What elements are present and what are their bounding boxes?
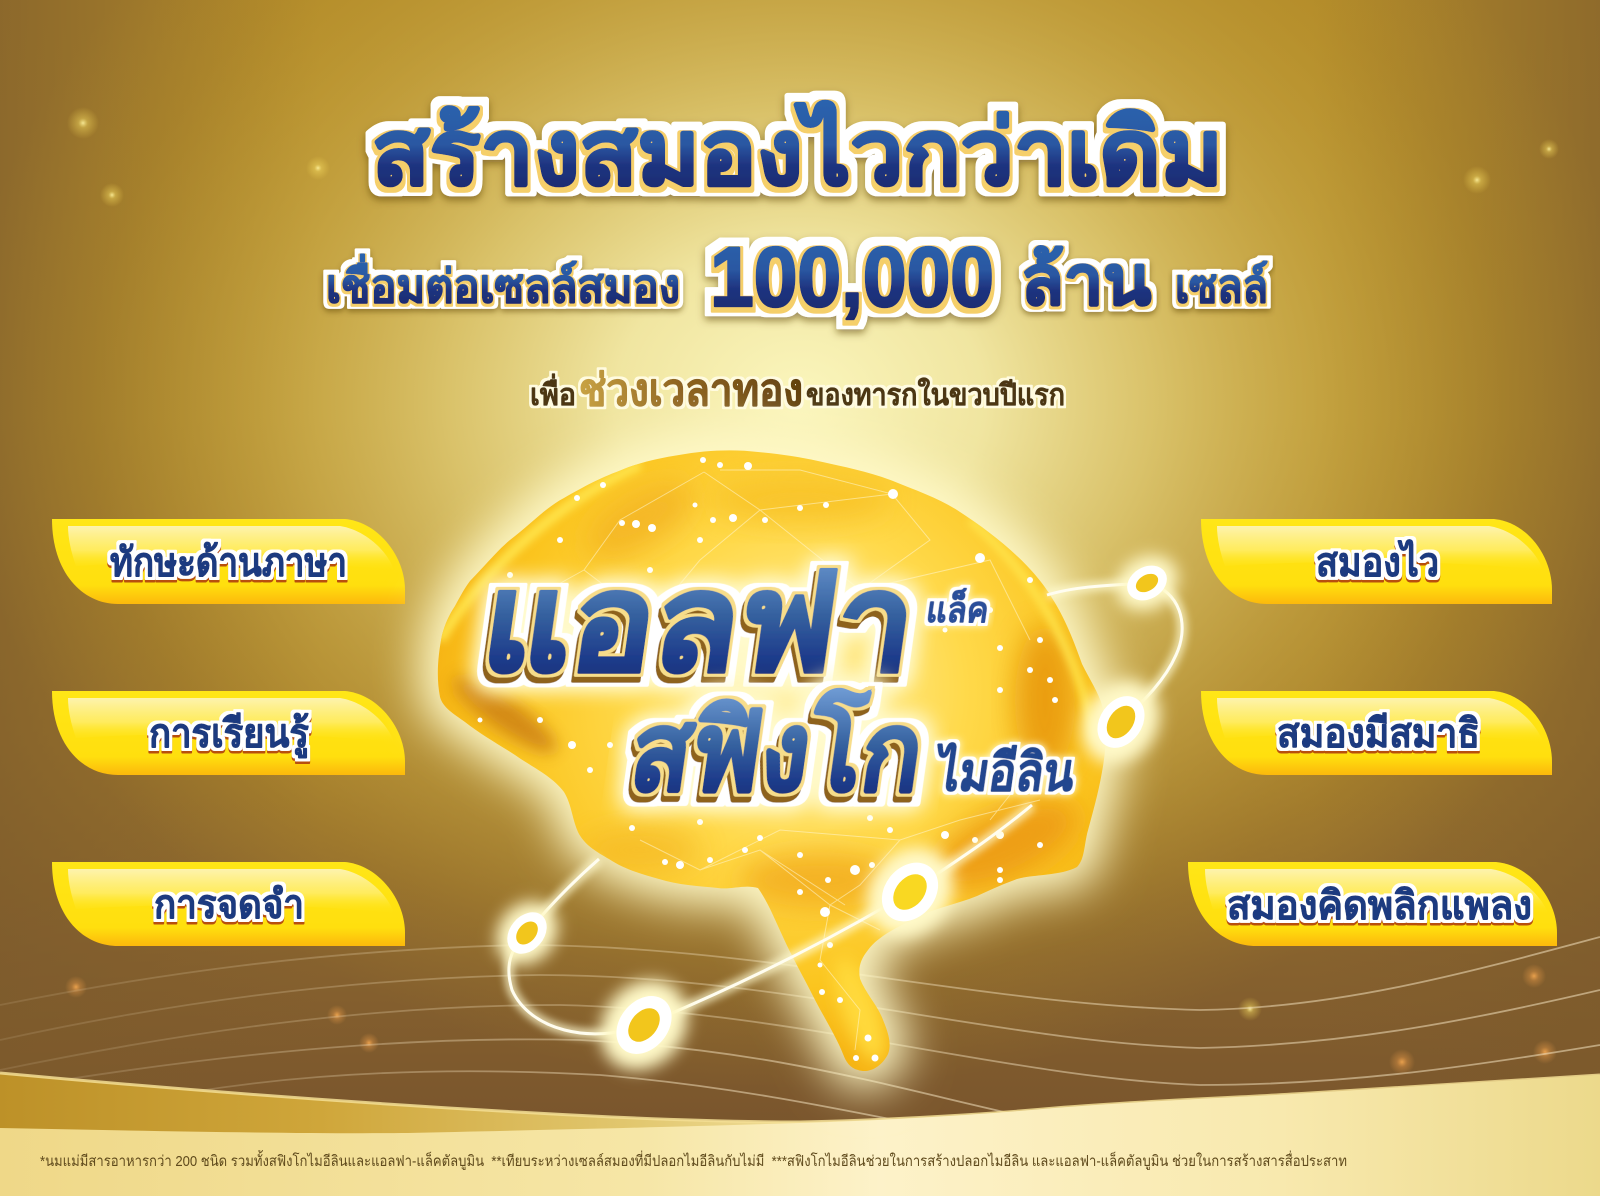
subtitle: connect brain cells: เชื่อมต่อเซลล์สมอง bbox=[326, 254, 680, 312]
orbit lines bbox=[509, 583, 1182, 1034]
footnote text: *นมแม่มีสารอาหารกว่า 200 ชนิด รวมทั้งสฟิงโกไมอีลินและแอลฟา-แล็คตัลบูมิน **เทียบระหว่างเซลล์สมองที่มีปลอกไมอีลินกับไม่มี ***สฟิงโกไมอีลินช่วยในการสร้างปลอกไมอีลิน และแอลฟา-แล็คตัลบูมิน ช่วยในการสร้างสารสื่อประสาท bbox=[40, 1150, 1347, 1170]
pill: focused brain bbox=[1201, 691, 1552, 775]
band highlight edge bbox=[0, 1073, 1600, 1122]
neural network dots bbox=[478, 457, 1058, 1062]
decorative wave lines bbox=[0, 937, 1600, 1125]
orbit node bbox=[1066, 665, 1176, 779]
brand text bbox=[474, 547, 1079, 814]
orbit rings with nodes bbox=[484, 544, 1188, 1087]
orbit node bbox=[849, 830, 971, 954]
pill: language skill: ทักษะด้านภาษา bbox=[110, 541, 347, 585]
footer cream panel bbox=[0, 1075, 1600, 1196]
orbit glow bbox=[509, 583, 1182, 1034]
left benefit pills bbox=[52, 519, 405, 946]
pill: fast brain: สมองไว bbox=[1316, 539, 1439, 585]
pill: creative brain: สมองคิดพลิกแพลง bbox=[1227, 884, 1532, 928]
orbit node bbox=[1106, 544, 1188, 622]
orbit node bbox=[583, 963, 705, 1087]
right benefit pills bbox=[1188, 519, 1557, 946]
pill: language skill bbox=[52, 519, 405, 604]
brand: myelin: ไมอีลิน bbox=[929, 742, 1079, 802]
glowing brain bbox=[430, 440, 1120, 1080]
subtitle: cells: เซลล์ bbox=[1175, 260, 1268, 312]
pill: learning: การเรียนรู้ bbox=[149, 712, 309, 758]
tagline start: เพื่อ bbox=[530, 373, 576, 412]
title: สร้างสมองไวกว่าเดิม bbox=[372, 101, 1223, 204]
brain body bbox=[430, 440, 1120, 1080]
pill: memory bbox=[52, 862, 405, 946]
unit: million: ล้าน bbox=[1021, 243, 1151, 319]
tagline golden period: ช่วงเวลาทอง bbox=[579, 366, 803, 415]
brain outer glow bbox=[438, 450, 1106, 1071]
pill: creative brain bbox=[1188, 862, 1557, 946]
subtitle line bbox=[326, 230, 1268, 324]
tagline end: ของทารกในขวบปีแรก bbox=[806, 377, 1065, 412]
brand: alpha: แอลฟา bbox=[474, 547, 925, 699]
orbit node bbox=[484, 889, 570, 977]
bottom gold band bbox=[0, 1073, 1600, 1196]
pill: memory: การจดจำ bbox=[154, 883, 304, 927]
brand: lac: แล็ค bbox=[924, 587, 992, 630]
pill: fast brain bbox=[1201, 519, 1552, 604]
number: 100,000: 100,000 bbox=[710, 230, 994, 324]
pill: focused brain: สมองมีสมาธิ bbox=[1277, 712, 1480, 756]
brand: sphingo: สฟิงโก bbox=[624, 688, 931, 814]
tagline bbox=[530, 366, 1065, 415]
background sparkles bbox=[65, 107, 1559, 1075]
pill: learning bbox=[52, 691, 405, 775]
neural network lines bbox=[530, 470, 1040, 1050]
